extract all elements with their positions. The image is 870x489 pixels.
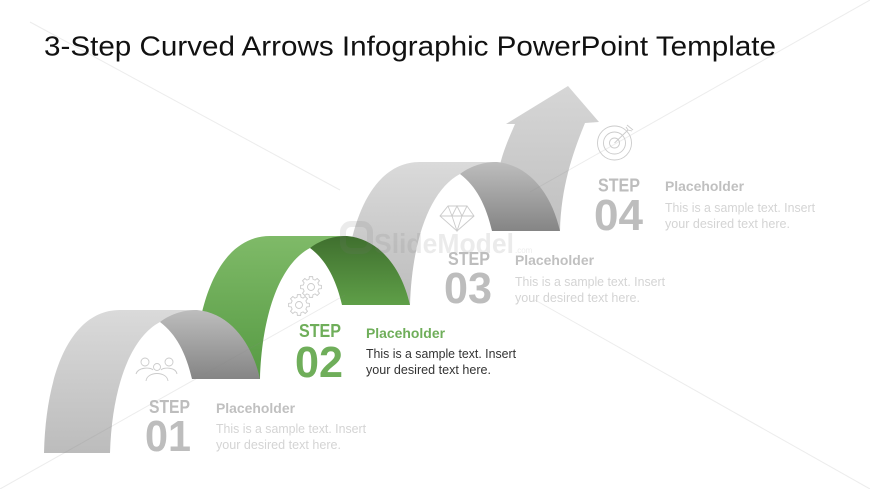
step 4 text: your desired text here. — [665, 217, 790, 231]
step 2 label: 02 — [295, 338, 343, 387]
step 2 text: This is a sample text. Insert — [366, 347, 517, 361]
icon: gears — [289, 277, 321, 315]
title: 3-Step Curved Arrows Infographic PowerPoint Template — [44, 30, 776, 62]
step 2 text: your desired text here. — [366, 363, 491, 377]
step 4 text: This is a sample text. Insert — [665, 201, 816, 215]
icon: target — [598, 125, 633, 160]
icon: people — [136, 358, 177, 381]
arrow: step 4 curved arrow — [498, 86, 599, 231]
step 2 text: Placeholder — [366, 325, 446, 341]
arch: step 2 green — [194, 236, 410, 379]
step 2 label: STEP — [299, 320, 341, 341]
step 3 text — [515, 252, 666, 305]
step 1 text: This is a sample text. Insert — [216, 422, 367, 436]
step 3 text: your desired text here. — [515, 291, 640, 305]
step 4 label: STEP — [598, 174, 640, 196]
step 1 text: your desired text here. — [216, 438, 341, 452]
step 4 text: Placeholder — [665, 178, 745, 194]
watermark: SlideModel — [374, 228, 514, 259]
step 3 label: STEP — [448, 248, 490, 269]
step 1 label: 01 — [145, 412, 191, 461]
arch: step 3 — [344, 162, 560, 305]
step 3 text: This is a sample text. Insert — [515, 275, 666, 289]
watermark — [343, 224, 533, 259]
watermark: .com — [515, 246, 533, 255]
step 1 text — [216, 400, 367, 452]
step 3 text: Placeholder — [515, 252, 595, 268]
icon: diamond — [440, 206, 474, 231]
step 1 text: Placeholder — [216, 400, 296, 416]
step 1 label: STEP — [149, 396, 190, 417]
step 2 text — [366, 325, 517, 377]
step 4 label: 04 — [594, 191, 644, 240]
step 3 label: 03 — [444, 264, 492, 313]
step 4 text — [665, 178, 816, 231]
arch: step 1 — [44, 310, 260, 453]
